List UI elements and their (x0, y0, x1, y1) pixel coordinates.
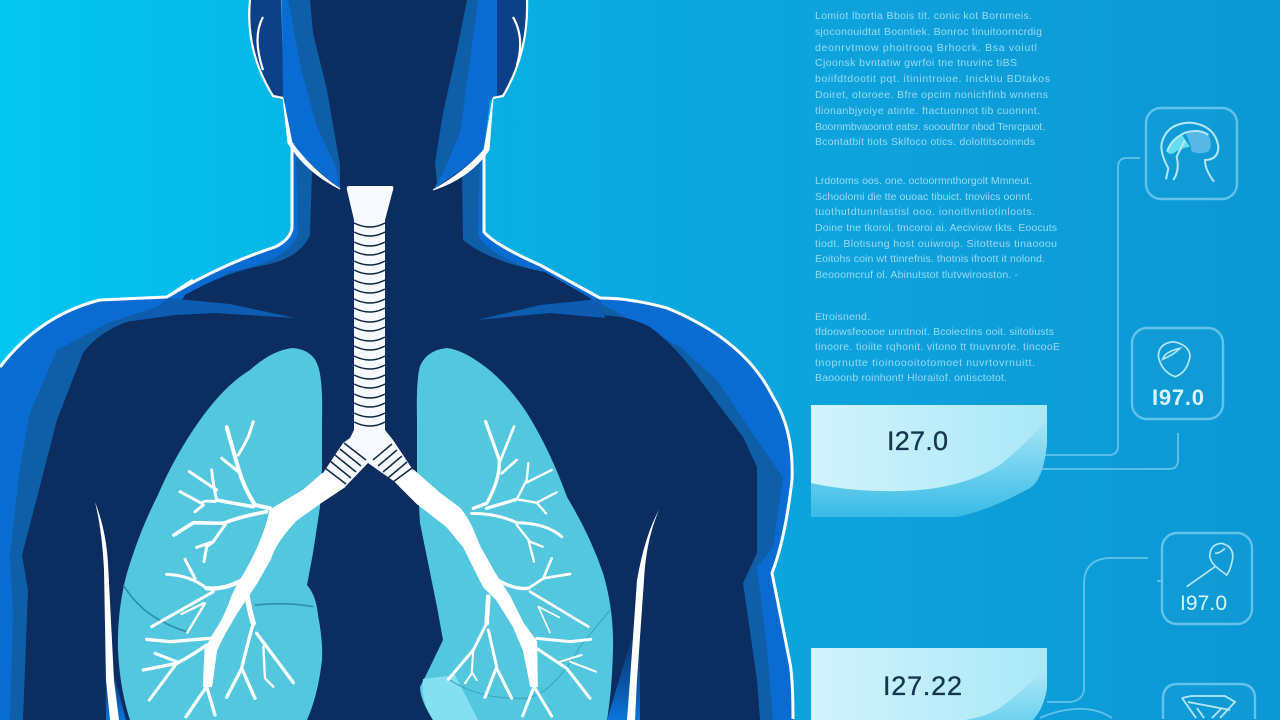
bronchial tree (395, 422, 596, 716)
icon value: I97.0 (1152, 385, 1204, 410)
text block: middle: Schoolomi die tte ouoac tibuict. tnoviics oonnt. (815, 191, 1033, 203)
text block: intro: deonrvtmow phoitrooq Brhocrk. Bsa voiutl (815, 42, 1037, 54)
text block: intro: Bcontatbit tiots Sklfoco otics. dololtitscoinnds (815, 136, 1035, 148)
card body (811, 648, 1047, 720)
text block: middle: tuothutdtunnlastisl ooo. ionoitlvntiotinloots. (815, 206, 1035, 218)
jaw line: left (283, 98, 340, 189)
card value: I27.22 (883, 671, 962, 701)
text block: intro (815, 10, 1050, 148)
text block: lower: Baooonb roinhont! Hloraitof. ontisctotot. (815, 372, 1007, 384)
icon value: I97.0 (1180, 592, 1227, 615)
connector lines (1040, 158, 1178, 718)
icon box: head (1146, 108, 1237, 199)
text block: intro: Doiret, otoroee. Bfre opcim nonichfinb wnnens (815, 89, 1048, 101)
text block: lower: tinoore. tioiite rqhonit. vitono tt tnuvnrote. tincooE (815, 341, 1060, 353)
icon: balloon with line (1187, 543, 1233, 587)
side rib highlight: left (95, 502, 126, 720)
lower lobe highlight (422, 675, 478, 720)
text block: intro: sjoconouidtat Boontiek. Bonroc tinuitoorncrdig (815, 26, 1042, 38)
text block: intro: boiifdtdootit pqt. itinintroioe. Inicktiu BDtakos (815, 73, 1050, 85)
body dark core (22, 0, 760, 720)
lobe fissure (450, 610, 610, 698)
card body (811, 405, 1047, 517)
text block: middle: Doine tne tkorol. tmcoroi ai. Aeciviow tkts. Eoocuts (815, 222, 1057, 234)
lung lobe (118, 348, 322, 720)
text block: intro: Lomiot lbortia Bbois tit. conic kot Bornmeis. (815, 10, 1032, 22)
lung fissures (123, 585, 313, 632)
shoulder wedge: right (477, 299, 605, 320)
neck and shoulder shading (10, 150, 783, 720)
text block: middle: Lrdotoms oos. one. octoormnthorgolt Mmneut. (815, 175, 1032, 187)
shoulder wedge: left (125, 298, 295, 322)
ear: right (491, 0, 527, 98)
card: value 1 (811, 405, 1047, 517)
text block: intro: Cjoonsk bvntatiw gwrfoi tne tnuvinc tiBS (815, 57, 1017, 69)
text block: intro: Boornmbvaoonot eatsr. soooutrtor nbod Tenrcpuot. (815, 121, 1045, 133)
card highlight (811, 648, 1047, 720)
text block: lower: tfdoowsfeoooe unntnoit. Bcoiectins ooit. siitotiusts (815, 326, 1054, 338)
text block: intro: tlionanbjyoiye atinte. ftactuonnot tib cuonnnt. (815, 105, 1040, 117)
text block: middle: tiodt. Blotisung host ouiwroip. Sitotteus tinaooou (815, 238, 1057, 250)
icon box: lung value (1132, 328, 1223, 419)
right lung (395, 348, 613, 720)
text block: lower (815, 311, 1060, 384)
icon box: balloon (1162, 533, 1252, 624)
human torso silhouette (0, 0, 793, 720)
text block: middle: Beooomcruf ol. Abinutstot tlutvwirooston. - (815, 269, 1018, 281)
card: value 2 (811, 648, 1047, 720)
text block: lower: tnoprnutte tioinoooitotomoet nuvrtovrnuitt. (815, 357, 1035, 369)
ear outline: left (249, 0, 283, 98)
text block: middle: Eoitohs coin wt ttinrefnis. thotnis ifroott it nolond. (815, 253, 1045, 265)
icon box: diamond (1163, 684, 1255, 719)
face shading (288, 0, 478, 189)
card highlight (811, 405, 1047, 491)
text block: middle (815, 175, 1057, 281)
left lung (118, 348, 345, 720)
text block: lower: Etroisnend. (815, 311, 870, 323)
lung lobe (417, 348, 613, 720)
side rib highlight: right (607, 510, 659, 720)
ear outline: right (493, 0, 527, 98)
icon: leaf oval (1158, 342, 1190, 377)
ear: left (249, 0, 284, 98)
tracheal rings (325, 223, 412, 484)
icon: diamond (1182, 696, 1235, 718)
card value: I27.0 (887, 426, 948, 456)
trachea upper funnel (323, 186, 413, 487)
body base (0, 0, 793, 720)
jaw line: right (433, 98, 493, 190)
body outline (0, 143, 793, 719)
bronchial tree (143, 422, 345, 717)
trachea (323, 186, 413, 487)
